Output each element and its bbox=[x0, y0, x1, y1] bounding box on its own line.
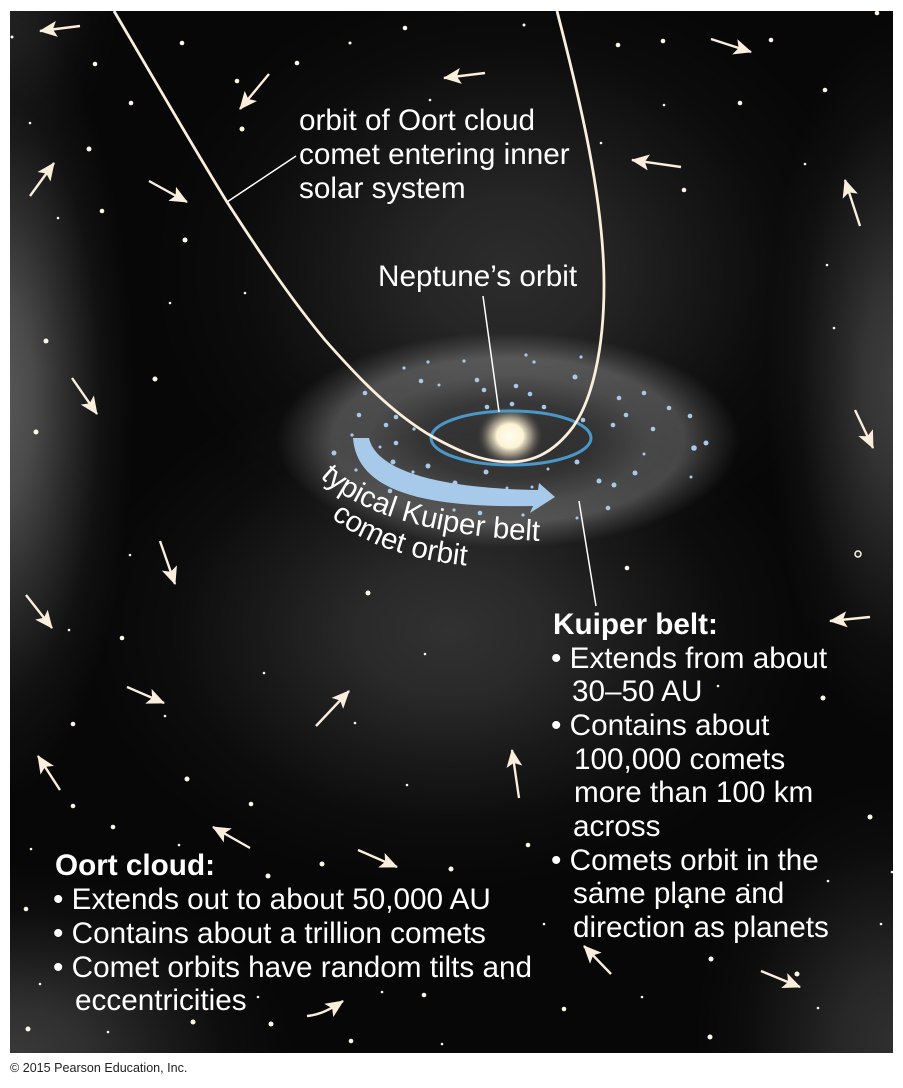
label: orbit of Oort cloud comet: comet entering inner bbox=[299, 138, 570, 171]
copyright: © 2015 Pearson Education, Inc. bbox=[10, 1061, 187, 1075]
Kuiper belt comets bbox=[332, 353, 708, 520]
text block: Kuiper belt: 30–50 AU bbox=[572, 675, 702, 708]
text block: Oort cloud: Oort cloud: bbox=[55, 849, 215, 882]
text block: Kuiper belt: across bbox=[573, 810, 660, 843]
text block: Kuiper belt: direction as planets bbox=[573, 911, 829, 944]
text block: Oort cloud: • Comet orbits have random tilts and bbox=[53, 951, 532, 984]
label: typical Kuiper belt comet orbit: typical Kuiper belt bbox=[322, 464, 540, 541]
text block: Kuiper belt: • Extends from about bbox=[551, 642, 828, 675]
label: typical Kuiper belt comet orbit: comet orbit bbox=[334, 508, 468, 566]
text block: Kuiper belt: Kuiper belt: bbox=[553, 608, 718, 641]
text block: Oort cloud: • Extends out to about 50,000 AU bbox=[53, 883, 491, 916]
text block: Oort cloud bbox=[53, 849, 532, 1017]
Neptune's orbit ring bbox=[431, 411, 591, 465]
label: Neptune's orbit: Neptune’s orbit bbox=[378, 260, 578, 293]
text block: Kuiper belt: • Comets orbit in the bbox=[551, 844, 819, 877]
text block: Kuiper belt bbox=[551, 501, 829, 944]
arrow: typical Kuiper belt comet orbit bbox=[353, 438, 555, 513]
text block: Oort cloud: • Contains about a trillion comets bbox=[53, 917, 486, 950]
label: orbit of Oort cloud comet: solar system bbox=[299, 172, 466, 205]
label: orbit of Oort cloud comet bbox=[227, 104, 570, 205]
text block: Oort cloud: eccentricities bbox=[75, 984, 247, 1017]
text block: Kuiper belt: same plane and bbox=[573, 877, 784, 910]
Oort comet orbit curve bbox=[114, 11, 604, 462]
label: orbit of Oort cloud comet: orbit of Oort cloud bbox=[299, 104, 535, 137]
text block: Kuiper belt: more than 100 km bbox=[574, 776, 813, 809]
glow: Sun bbox=[477, 406, 543, 466]
label: Neptune's orbit bbox=[378, 260, 578, 412]
text block: Kuiper belt: • Contains about bbox=[551, 709, 770, 742]
text block: Kuiper belt: 100,000 comets bbox=[574, 743, 785, 776]
